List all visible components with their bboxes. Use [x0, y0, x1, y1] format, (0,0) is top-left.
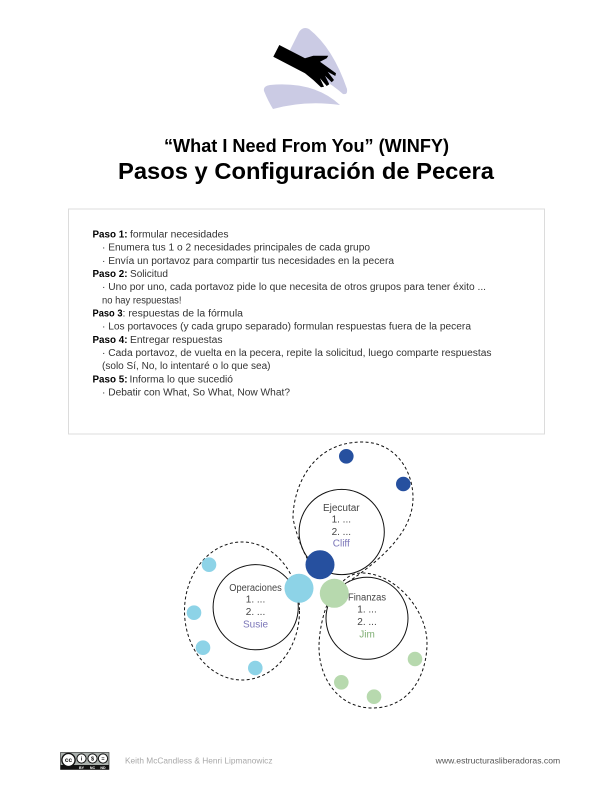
step 3: : respuestas de la fórmula [122, 308, 243, 320]
icon: Creative Commons badge [60, 752, 109, 770]
step 3 [92, 308, 471, 333]
group: Ejecutar: Cliff [333, 539, 350, 550]
group: Ejecutar [293, 442, 413, 590]
group: Finanzas: 1. ... [357, 605, 377, 616]
heading: Pasos y Configuración de Pecera: Pasos y Configuración de Pecera [118, 158, 495, 184]
step 1 [92, 229, 394, 267]
icon: Creative Commons badge: = [101, 756, 105, 762]
icon: Creative Commons badge: BY [79, 766, 85, 770]
group: Ejecutar: Ejecutar [323, 503, 360, 514]
icon: Creative Commons badge: i [81, 756, 83, 762]
step 4: (solo Sí, No, lo intentaré o lo que sea) [102, 361, 270, 372]
step 1: formular necesidades [130, 229, 228, 240]
step 4: Paso 4: [92, 335, 128, 346]
diagram: fishbowl groups [184, 442, 427, 708]
step 1: Paso 1: [92, 229, 128, 240]
group: Finanzas [319, 573, 427, 708]
step 5: · Debatir con What, So What, Now What? [102, 388, 290, 399]
step 2 [92, 269, 486, 306]
step 5 [92, 374, 290, 399]
group: Finanzas: 2. ... [357, 617, 377, 628]
title: WINFY subtitle: “What I Need From You” (WINFY) [164, 136, 449, 156]
step 2: Paso 2: [92, 269, 128, 280]
step 1: · Envía un portavoz para compartir tus necesidades en la pecera [102, 256, 394, 267]
footer: website: www.estructurasliberadoras.com [435, 755, 560, 765]
group: Operaciones: 2. ... [246, 607, 265, 618]
step 1: · Enumera tus 1 o 2 necesidades principales de cada grupo [102, 243, 370, 254]
group: Operaciones: 1. ... [246, 595, 265, 606]
step 5: Paso 5: [92, 374, 128, 385]
step 3: Paso 3 [92, 308, 123, 320]
step 4 [92, 335, 492, 372]
group: Operaciones [184, 542, 314, 680]
icon: Creative Commons badge: NC [90, 766, 95, 770]
step 2: · Uno por uno, cada portavoz pide lo que necesita de otros grupos para tener éxito ... [102, 282, 486, 293]
footer: authors: Keith McCandless & Henri Lipmanowicz [125, 755, 272, 765]
step 4: · Cada portavoz, de vuelta en la pecera, repite la solicitud, luego comparte respuestas [102, 348, 492, 359]
icon: Creative Commons badge: cc [65, 757, 72, 764]
group: Finanzas: Finanzas [348, 593, 386, 604]
group: Operaciones: Susie [243, 619, 268, 630]
group: Operaciones: Operaciones [229, 583, 282, 594]
group: Ejecutar: 1. ... [332, 515, 351, 526]
group: Finanzas: Jim [359, 629, 375, 640]
icon: helping hand logo [264, 28, 347, 109]
step 3: · Los portavoces (y cada grupo separado) formulan respuestas fuera de la pecera [102, 322, 471, 333]
step 5: Informa lo que sucedió [130, 374, 233, 385]
step 2: no hay respuestas! [102, 295, 182, 306]
step 2: Solicitud [130, 269, 168, 280]
icon: Creative Commons badge: ND [100, 766, 106, 770]
icon: Creative Commons badge: $ [91, 756, 94, 762]
step 4: Entregar respuestas [130, 335, 222, 346]
panel: steps [68, 209, 544, 434]
group: Ejecutar: 2. ... [332, 527, 351, 538]
